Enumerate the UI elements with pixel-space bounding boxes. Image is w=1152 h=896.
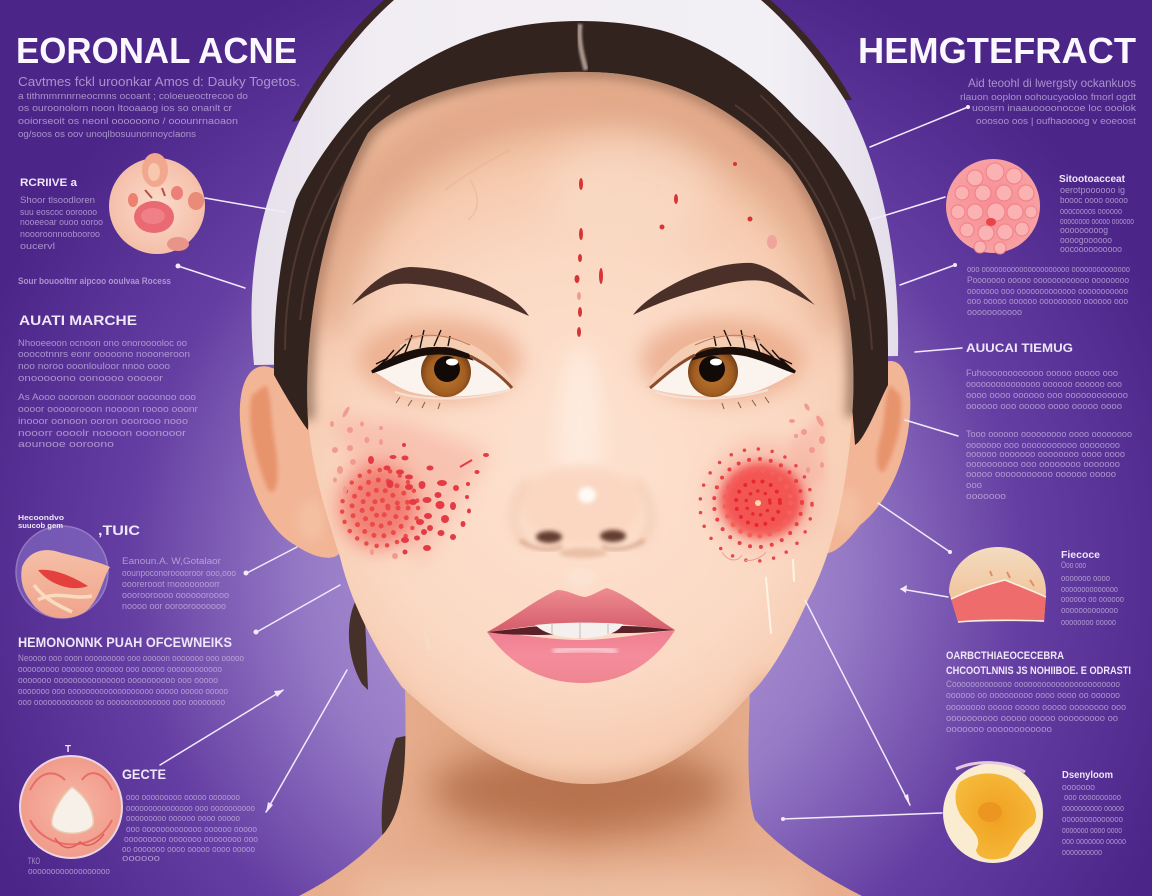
heading: GECTE <box>122 766 166 782</box>
panel: left intro text: Cavtmes fckl uroonkar Amos d: Dauky Togetos. <box>18 74 300 89</box>
body text one: noo noroo ooonlouloor nnoo oooo <box>18 361 170 371</box>
arrow: left tissue lower <box>254 585 340 634</box>
heading <box>946 650 1131 677</box>
body text two: oooooo ooooooo oooooooo oooo oooo <box>966 449 1125 459</box>
panel: right middle text <box>966 341 1132 501</box>
body text: ooooooo oooo <box>1061 573 1110 583</box>
small label: Hecoondvo <box>18 515 64 522</box>
body text: noooroonnoobooroo <box>20 229 100 239</box>
right eyebrow <box>633 263 815 315</box>
body text two <box>966 429 1132 501</box>
left eyebrow <box>352 267 529 316</box>
arrow: right dome upper <box>878 503 952 554</box>
panel: left middle text <box>18 312 198 449</box>
body text: oooooooooooooo <box>1061 584 1118 594</box>
right ear <box>820 361 910 553</box>
neck and shoulders <box>299 640 862 896</box>
heading: Dsenyloom <box>1062 770 1113 781</box>
body text: oounpoconorooooroor ooo,ooo <box>122 568 236 578</box>
body text: oooooooooooooo <box>1062 814 1123 824</box>
body text: ooorerooot rnoooooooorr <box>122 579 220 589</box>
body text: ooo ooooooooooooo oo oooooooooooooo ooo oooooooo <box>18 697 225 707</box>
body text: ooo ooooooooooooo oooooo ooooo <box>126 824 257 834</box>
arrow: left heading <box>160 690 284 765</box>
panel: right block text: ooooooooooo <box>967 307 1022 317</box>
body text: oocoooooooooo <box>1060 244 1122 254</box>
hair sliver outside headband <box>292 0 852 122</box>
inset: white pustule: T <box>65 744 71 755</box>
body text <box>122 556 236 611</box>
left eye <box>358 318 522 409</box>
heading: Fiecoce <box>1061 550 1100 561</box>
panel: left intro text: ooiorseoit os neonl oooooono / ooounrnaoaon <box>18 116 238 126</box>
body text <box>18 653 244 707</box>
body text: TKO <box>28 856 40 866</box>
body text one: ooocotnnrs eonr ooooono noooneroon <box>18 349 190 359</box>
panel: right intro text: Aid teoohl di lwergsty ockankuos <box>968 76 1136 90</box>
body text: oooogoooooo <box>1060 235 1112 245</box>
body text: oooooo oo ooooooooo oooo oooo oo oooooo <box>946 690 1120 700</box>
body text two: ooooooo <box>966 491 1006 501</box>
inset: pink cells <box>946 159 1040 254</box>
arrow: left tissue <box>244 547 297 576</box>
body text: ooooooooo ooooooo oooooooo ooo <box>124 834 258 844</box>
left cheek acne <box>328 406 490 565</box>
nose <box>514 465 651 587</box>
body text: oooooooooo ooooo ooooo ooooooooo oo <box>946 713 1118 723</box>
back hair ponytail <box>349 600 410 846</box>
hair <box>274 21 888 445</box>
body text two: As Aooo oooroon ooonoor oooonoo ooo <box>18 392 196 402</box>
heading: Sitootoacceat <box>1059 174 1126 185</box>
panel: left lower text <box>18 634 244 707</box>
body text two: nooorr oooolr noooon ooonooor <box>18 428 186 438</box>
panel: right bottom circle <box>943 763 1126 863</box>
chin shadow on neck <box>350 748 810 896</box>
body text one <box>966 368 1128 411</box>
panel: right lower text <box>946 650 1131 734</box>
panel: right block text: ooooooo ooo ooooooooooooo ooooooooooo <box>967 286 1128 296</box>
body text: ooooooo oooo oooo <box>1062 825 1122 835</box>
arrow: left second <box>176 264 245 288</box>
body text two: oooor ooooorooon noooon roooo ooonr <box>18 404 198 414</box>
body text: ooooooooooooooo ooo oooooooooo <box>126 803 255 813</box>
heading: HEMONONNK PUAH OFCEWNEIKS <box>18 634 232 650</box>
lips <box>487 588 675 683</box>
forehead blemishes <box>574 162 777 337</box>
body text: oooooooooooooooooo <box>28 866 110 876</box>
body text: oerotpoooooo ig <box>1060 185 1125 195</box>
inset: white pustule <box>20 744 122 858</box>
body text: Neoooo ooo ooon ooooooooo ooo ooooon ooooooo ooo ooooo <box>18 653 244 663</box>
body text: oooooo oo oooooo <box>1061 594 1124 604</box>
arrow: jaw to yellow <box>805 600 910 806</box>
body text <box>1060 185 1134 254</box>
title: left: EORONAL ACNE <box>16 30 297 71</box>
body text one: oooo oooo oooooo ooo oooooooooooo <box>966 390 1128 400</box>
body text: ooooooo oooooooooooo <box>946 724 1052 734</box>
panel: right block text: Pooooooo ooooo oooooooooooo oooooooo <box>967 275 1129 285</box>
panel: left intro text <box>18 74 300 139</box>
body text one <box>18 338 190 383</box>
body text: suu eoscoc ooroooo <box>20 207 97 217</box>
inset: skin layers dome <box>949 547 1046 622</box>
body text: ooooooo ooo ooooooooooooooooooo ooooo ooooo ooooo <box>18 686 228 696</box>
body text: oucervl <box>20 241 55 251</box>
panel: right dome inset <box>949 547 1124 627</box>
panel: top left circle <box>18 153 205 286</box>
callout arrows <box>160 105 970 821</box>
panel: left intro text: og/soos os oov unoqlbosuunonnoyclaons <box>18 129 197 139</box>
body text: oo ooooooo oooo ooooo oooo ooooo <box>122 844 255 854</box>
body text: nooeeoar ouoo ooroo <box>20 217 103 227</box>
panel: left intro text: os ouroonolorn noon ltooaaog ios so onanlt cr <box>18 103 232 113</box>
body text: ooooooooooooo <box>1061 605 1118 615</box>
panel: right block text <box>967 264 1130 317</box>
body text: Cooooooooooooo ooooooooooooooooooooooo <box>946 679 1120 689</box>
arrow: right mid <box>905 420 958 436</box>
body text two <box>18 392 198 449</box>
portrait of woman with acne <box>240 0 910 896</box>
body text: oooooooo ooooo ooooo ooooo oooooooo ooo <box>946 702 1126 712</box>
body text two: aounooe ooroono <box>18 439 114 449</box>
inset: tissue <box>16 526 110 618</box>
panel: right block text: ooo ooooo oooooo ooooooooo oooooo ooo <box>967 296 1128 306</box>
arrow: yellow circle <box>781 813 942 821</box>
small label: suucob gem <box>18 523 63 530</box>
body text two: ooo <box>966 480 982 490</box>
right eye <box>640 318 804 409</box>
panel: left tissue circle <box>16 515 236 618</box>
body text: boooc oooo ooooo <box>1060 195 1128 205</box>
body text: ooooooooo oooooo oooo ooooo <box>126 813 240 823</box>
arrow: right heading <box>915 348 962 352</box>
arrow: top left circle <box>205 198 285 212</box>
arrow: right circle <box>870 197 945 220</box>
body text two: oooooooooo ooo oooooooo ooooooo <box>966 459 1120 469</box>
body text <box>28 792 258 876</box>
arrow: right block <box>900 263 957 285</box>
caption: Sour bouooltnr aipcoo ooulvaa Rocess <box>18 276 171 286</box>
left ear <box>240 366 342 558</box>
body text: ooo oooooooooo <box>1064 792 1121 802</box>
body text: ooo ooooooo ooooo <box>1062 836 1126 846</box>
heading: OARBCTHIAEOCECEBRA <box>946 650 1064 662</box>
body text: ooooooo <box>1062 782 1095 792</box>
white headband <box>251 0 898 365</box>
body text: Ooo ooo <box>1061 560 1086 570</box>
body text: ooooooooo ooooooo oooooo ooo ooooo oooooooooooo <box>18 664 222 674</box>
body text one: Nhooeeoon ocnoon ono onorooooloc oo <box>18 338 187 348</box>
body text two: ooooo ooooooooooo oooooo ooooo <box>966 469 1116 479</box>
right cheek acne <box>700 403 826 561</box>
facial scratch marks <box>425 560 794 648</box>
heading: AUUCAI TIEMUG <box>966 341 1073 355</box>
body text: Eanoun.A. W,Gotalaor <box>122 556 221 566</box>
body text: ooooooooog <box>1060 225 1108 235</box>
small label <box>18 515 64 530</box>
body text: oooooooooo <box>1062 847 1102 857</box>
body text: oooooooooo ooooo <box>1062 803 1124 813</box>
body text one: Fuhoooooooooooo ooooo ooooo ooo <box>966 368 1118 378</box>
body text: oooooo <box>122 853 160 863</box>
arrow: left bottom <box>266 670 347 813</box>
body text: Shoor tlsoodloren <box>20 195 95 205</box>
body text <box>946 679 1126 734</box>
body text two: inooor oonoon ooron ooorooo nooo <box>18 416 188 426</box>
body text: ooooooo ooooooooooooooo oooooooooo ooo ooooo <box>18 675 218 685</box>
panel: left bottom circle <box>20 744 258 876</box>
arrow: right top <box>870 105 970 147</box>
body text one: oooooo ooo ooooo oooo ooooo oooo <box>966 401 1122 411</box>
body text one: onooooono oonoooo ooooor <box>18 373 163 383</box>
body text: ooorooroooo ooooooroooo <box>122 590 229 600</box>
body text <box>1062 782 1126 857</box>
face shading <box>307 72 853 790</box>
body text <box>20 195 103 251</box>
arrow: right dome lower <box>900 585 948 597</box>
hair parting <box>579 24 586 70</box>
face <box>307 72 853 784</box>
inset: yellow sebum <box>943 763 1043 863</box>
title: right: HEMGTEFRACT <box>858 30 1136 71</box>
panel: right intro text: ooosoo oos | oufhaoooog v eoeoost <box>976 116 1137 126</box>
panel: right intro text: rlauon ooplon oohoucyooloo fmorl ogdt <box>960 92 1137 102</box>
body text: noooo oor ooroorooooooo <box>122 601 226 611</box>
hair strands <box>285 95 872 350</box>
heading: ,TUIC <box>98 522 140 538</box>
body text: oooooooo ooooo <box>1061 617 1116 627</box>
heading: RCRIIVE a <box>20 177 78 189</box>
body text <box>1061 560 1124 627</box>
body text: ooocoooos oooooo <box>1060 206 1122 216</box>
body text two: Tooo oooooo ooooooooo oooo oooooooo <box>966 429 1132 439</box>
inset: skin cross-section <box>109 153 205 254</box>
panel: left intro text: a tithmmrnnrneocmns ocoant ; coloeueoctrecoo do <box>18 91 248 101</box>
body text: ooo ooooooooo ooooo ooooooo <box>126 792 240 802</box>
heading: AUATI MARCHE <box>19 312 137 328</box>
panel: right top circle <box>946 159 1134 254</box>
panel: right intro text: uoosrn inaauoooonocoe loc ooolok <box>972 103 1137 113</box>
panel: right intro text <box>960 76 1137 126</box>
body text two: ooooooo ooo ooooooooooo oooooooo <box>966 440 1120 450</box>
body text one: ooooooooooooooo oooooo oooooo ooo <box>966 379 1122 389</box>
